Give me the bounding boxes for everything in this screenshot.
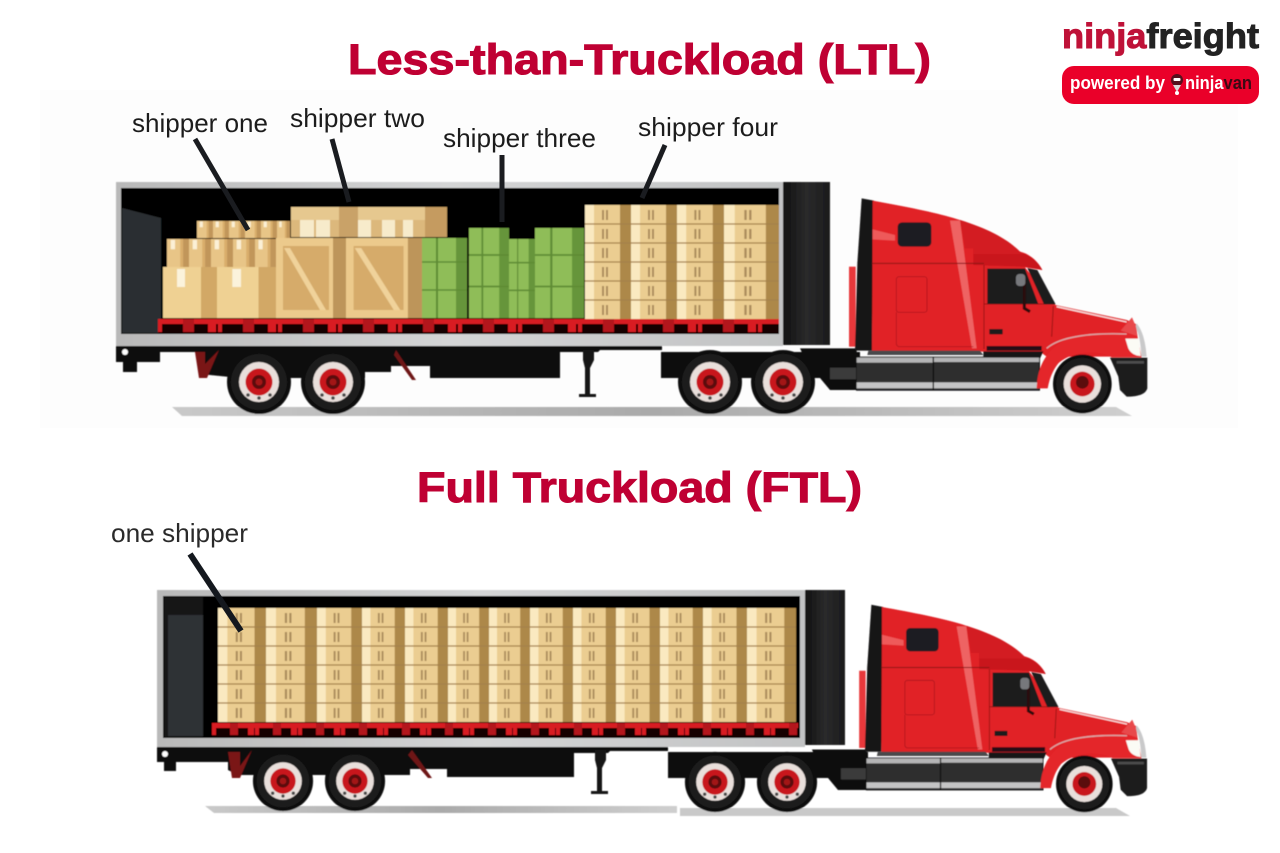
truck: FTL [157, 590, 1147, 816]
drive wheels [685, 752, 817, 812]
cargo: one shipper stacks [218, 608, 796, 722]
truck: LTL [116, 182, 1147, 416]
tractor chassis link [668, 752, 868, 790]
label: shipper four: shipper four [638, 112, 778, 142]
label: shipper one [132, 108, 268, 230]
label: shipper three: shipper three [443, 123, 596, 153]
badge [1062, 66, 1259, 104]
pallets [158, 319, 779, 333]
badge: powered by [1070, 73, 1165, 93]
label: shipper one: shipper one [132, 108, 268, 138]
cargo: shipper three green boxes [422, 228, 584, 318]
trailer undercarriage [116, 344, 662, 397]
label: one shipper [111, 518, 248, 631]
ground shadow [205, 806, 1130, 816]
ground shadow [172, 407, 1132, 416]
logo: ninjafreight powered by ninjavan [1062, 17, 1259, 104]
badge: ninjavan [1185, 73, 1252, 93]
title: Less-than-Truckload (LTL): Less-than-Truckload (LTL) [348, 36, 931, 84]
label: shipper four [638, 112, 778, 198]
label: shipper two: shipper two [290, 103, 425, 133]
trailer body [157, 590, 845, 747]
cargo: shipper four stacks [585, 205, 779, 319]
pallets [212, 723, 798, 737]
cargo: shipper one cartons [163, 221, 290, 318]
trailer wheels [253, 751, 385, 811]
wordmark: ninjafreight [1062, 17, 1259, 56]
tractor chassis link [661, 352, 860, 390]
trailer body [116, 182, 830, 346]
label: one shipper: one shipper [111, 518, 248, 548]
label: shipper two [290, 103, 425, 202]
cargo: shipper two crates [276, 207, 447, 318]
title: Full Truckload (FTL): Full Truckload (FTL) [417, 464, 862, 512]
tractor cab [812, 605, 1147, 812]
drive wheels [678, 350, 815, 414]
trailer wheels [227, 350, 365, 414]
trailer undercarriage [157, 745, 668, 794]
tractor cab [800, 198, 1147, 413]
